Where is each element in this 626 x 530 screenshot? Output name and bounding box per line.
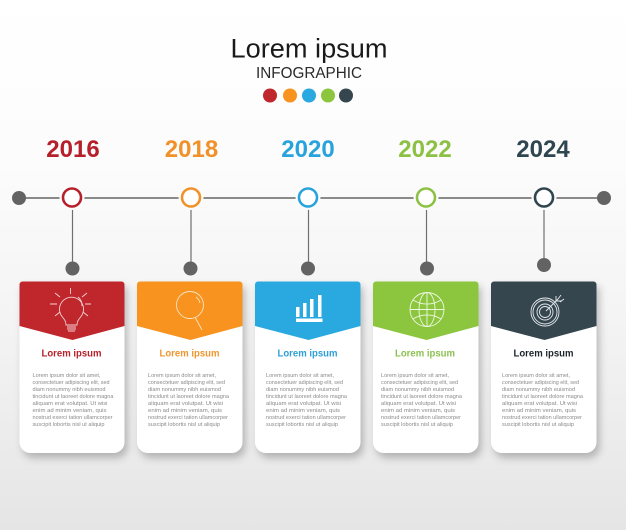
body text: consectetuer adipiscing elit, sed <box>381 380 458 386</box>
body text: diam nonummy nibh euismod <box>148 387 221 393</box>
body text: Lorem ipsum dolor sit amet, <box>502 373 570 379</box>
body text <box>381 373 463 428</box>
year labels: 2018 <box>165 136 218 163</box>
body text: suscipit lobortis nisl ut aliquip <box>32 422 104 428</box>
body text: tincidunt ut laoreet dolore magna <box>32 394 114 400</box>
body text: suscipit lobortis nisl ut aliquip <box>381 422 453 428</box>
body text: suscipit lobortis nisl ut aliquip <box>148 422 220 428</box>
body text: Lorem ipsum dolor sit amet, <box>381 373 449 379</box>
body text: consectetuer adipiscing elit, sed <box>266 380 343 386</box>
body text: tincidunt ut laoreet dolore magna <box>381 394 463 400</box>
year labels <box>46 136 570 163</box>
panel: 2018 card <box>137 282 242 453</box>
title <box>230 34 388 82</box>
body text <box>32 373 114 428</box>
year labels: 2020 <box>281 136 335 163</box>
body text: Lorem ipsum dolor sit amet, <box>32 373 101 379</box>
year labels: 2024 <box>516 136 570 163</box>
panel: 2020 card <box>255 282 360 453</box>
body text: aliquam erat volutpat. Ut wisi <box>381 401 456 407</box>
body text: tincidunt ut laoreet dolore magna <box>266 394 348 400</box>
body text: enim ad minim veniam, quis <box>32 408 107 414</box>
body text: diam nonummy nibh euismod <box>266 387 339 393</box>
heading: Lorem ipsum <box>42 348 102 360</box>
body text: aliquam erat volutpat. Ut wisi <box>148 401 223 407</box>
body text: diam nonummy nibh euismod <box>502 387 575 393</box>
heading: Lorem ipsum <box>395 348 455 360</box>
body text: enim ad minim veniam, quis <box>381 408 455 414</box>
year labels: 2022 <box>398 136 452 163</box>
panel: 2016 card <box>20 282 124 453</box>
icon: target with arrow <box>531 295 564 326</box>
body text: consectetuer adipiscing elit, sed <box>502 380 579 386</box>
body text: consectetuer adipiscing elit, sed <box>32 380 110 386</box>
heading: Lorem ipsum <box>514 348 574 360</box>
body text: enim ad minim veniam, quis <box>148 408 222 414</box>
body text: nostrud exerci tation ullamcorper <box>381 415 461 421</box>
body text: Lorem ipsum dolor sit amet, <box>148 373 216 379</box>
subtitle: INFOGRAPHIC <box>256 65 362 82</box>
body text: diam nonummy nibh euismod <box>381 387 454 393</box>
body text: nostrud exerci tation ullamcorper <box>502 415 582 421</box>
colour dots legend <box>263 88 353 102</box>
body text <box>148 373 230 428</box>
body text: aliquam erat volutpat. Ut wisi <box>502 401 577 407</box>
icon: globe <box>410 292 444 326</box>
body text <box>266 373 348 428</box>
body text: nostrud exerci tation ullamcorper <box>148 415 228 421</box>
panel: 2022 card <box>373 282 478 453</box>
body text: enim ad minim veniam, quis <box>266 408 340 414</box>
icon: light bulb <box>50 288 91 331</box>
icon: bar chart <box>296 295 322 322</box>
body text: suscipit lobortis nisl ut aliquip <box>266 422 338 428</box>
timeline <box>12 185 611 276</box>
heading: Lorem ipsum <box>160 348 220 360</box>
panel: 2024 card <box>491 282 597 453</box>
title: Lorem ipsum <box>230 34 388 64</box>
body text: consectetuer adipiscing elit, sed <box>148 380 225 386</box>
heading: Lorem ipsum <box>278 348 338 360</box>
body text: suscipit lobortis nisl ut aliquip <box>502 422 574 428</box>
year labels: 2016 <box>46 136 100 163</box>
body text: tincidunt ut laoreet dolore magna <box>148 394 230 400</box>
body text: aliquam erat volutpat. Ut wisi <box>266 401 341 407</box>
body text: nostrud exerci tation ullamcorper <box>266 415 346 421</box>
body text: aliquam erat volutpat. Ut wisi <box>32 401 108 407</box>
body text: tincidunt ut laoreet dolore magna <box>502 394 584 400</box>
body text: enim ad minim veniam, quis <box>502 408 576 414</box>
body text: Lorem ipsum dolor sit amet, <box>266 373 334 379</box>
icon: magnifying glass <box>176 292 204 330</box>
body text: diam nonummy nibh euismod <box>32 387 106 393</box>
body text: nostrud exerci tation ullamcorper <box>32 415 113 421</box>
body text <box>502 373 584 428</box>
